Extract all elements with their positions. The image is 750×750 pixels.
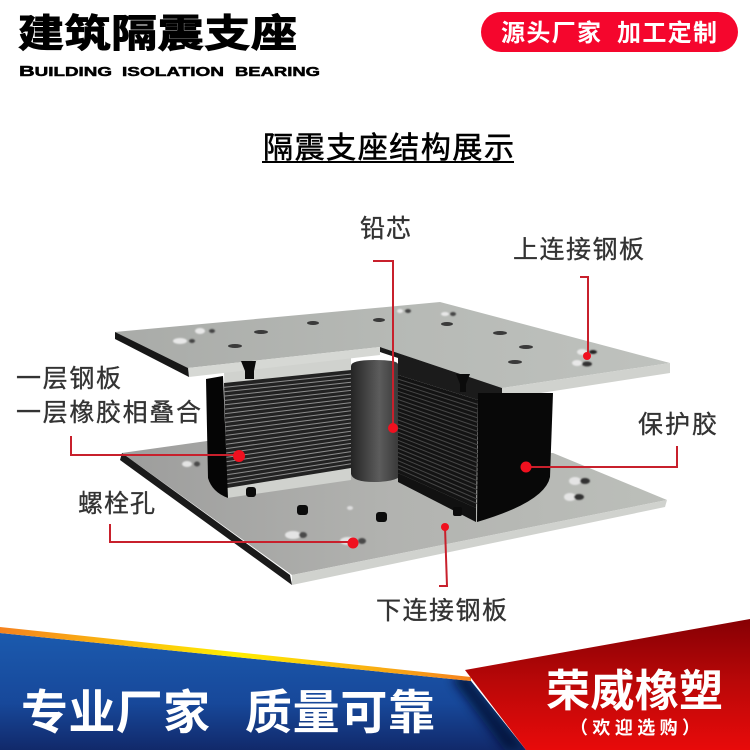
right lamination stack bbox=[398, 375, 478, 522]
footer banner: red brand bbox=[465, 619, 750, 750]
subtitle: BEARING bbox=[235, 64, 320, 79]
callout: lower connecting plate bbox=[376, 523, 507, 625]
bolt: lower right bbox=[453, 507, 462, 516]
callout: upper connecting plate bbox=[513, 236, 644, 360]
footer banner: blue: 专业厂家 bbox=[21, 686, 210, 739]
lower steel plate bbox=[120, 441, 667, 585]
callout: steel and rubber layers: 一层钢板 bbox=[16, 365, 121, 393]
footer banner: blue bbox=[0, 627, 526, 750]
callout: lead core bbox=[360, 215, 411, 433]
callout: bolt hole bbox=[78, 490, 358, 548]
left protective rubber wall bbox=[206, 376, 228, 498]
right protective rubber bbox=[477, 393, 553, 522]
diagram: isolation bearing bbox=[115, 302, 670, 585]
callout: lead core: 铅芯 bbox=[360, 215, 411, 243]
footer banner: red brand: 荣威橡塑 bbox=[546, 667, 723, 716]
badge: factory direct: 源头厂家 bbox=[501, 20, 601, 47]
upper steel plate bbox=[115, 302, 670, 400]
title: 建筑隔震支座 bbox=[18, 12, 297, 55]
callout: bolt hole: 螺栓孔 bbox=[78, 490, 155, 518]
badge: factory direct: 加工定制 bbox=[617, 20, 717, 47]
footer banner: red brand: （欢迎选购） bbox=[570, 718, 700, 738]
callout: steel and rubber layers: 一层橡胶相叠合 bbox=[16, 399, 201, 427]
subtitle bbox=[19, 63, 320, 80]
bolt: upper left bbox=[241, 361, 256, 379]
left lamination stack bbox=[224, 356, 351, 498]
badge: factory direct bbox=[481, 12, 738, 52]
subtitle: B UILDING bbox=[19, 63, 112, 80]
heading: 隔震支座结构展示 bbox=[263, 132, 514, 165]
callout: protective rubber: 保护胶 bbox=[638, 411, 717, 439]
bolt: lower left bbox=[246, 487, 256, 497]
bolt: upper right bbox=[456, 374, 470, 392]
callout: steel and rubber layers bbox=[16, 365, 245, 462]
callout: protective rubber bbox=[520, 411, 717, 472]
callout: upper connecting plate: 上连接钢板 bbox=[513, 236, 644, 264]
callout: lower connecting plate: 下连接钢板 bbox=[376, 597, 507, 625]
subtitle: ISOLATION bbox=[122, 64, 224, 79]
lead core cylinder bbox=[351, 360, 398, 482]
footer banner: blue: 质量可靠 bbox=[245, 686, 435, 739]
